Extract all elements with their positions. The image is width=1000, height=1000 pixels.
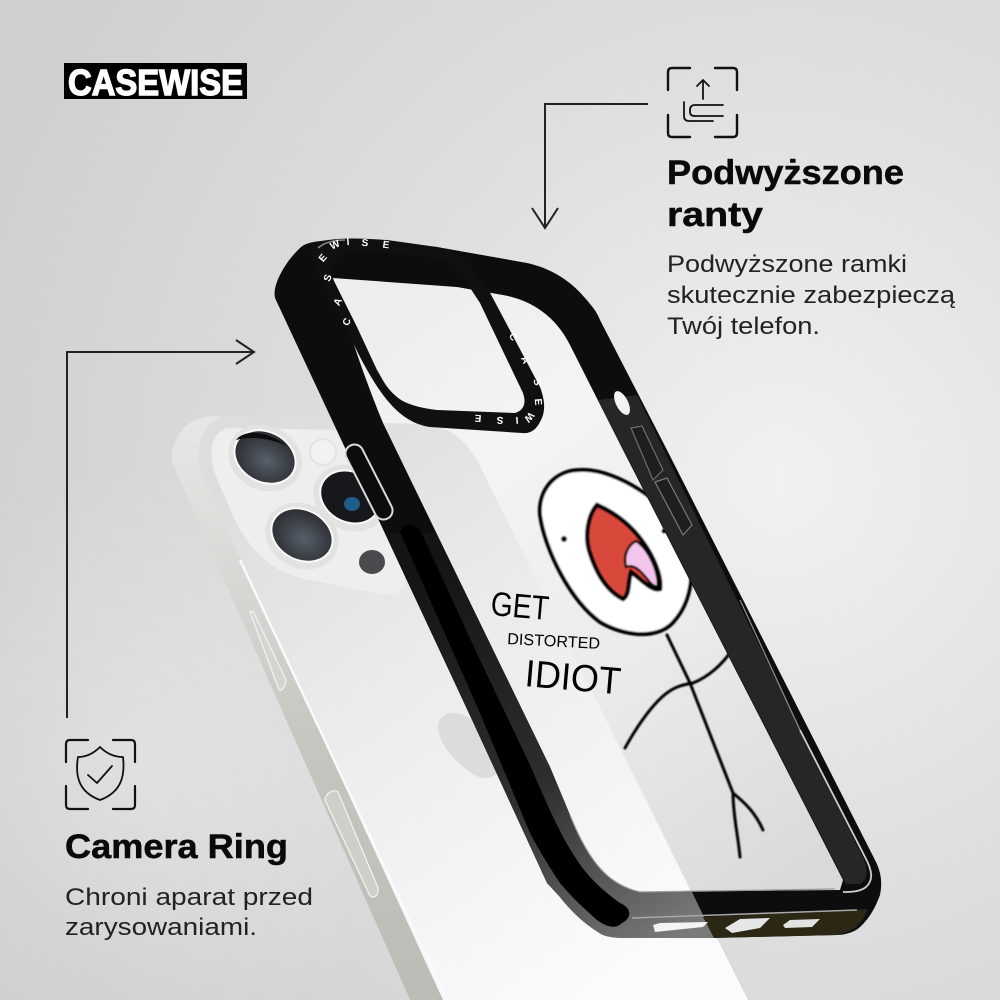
ring edge highlight	[318, 240, 345, 248]
camera bump	[211, 428, 405, 594]
GET: GET	[489, 585, 550, 628]
heading: raised edges: Podwyższone	[667, 154, 904, 192]
arrow: camera callout to ring	[67, 340, 254, 718]
usb cutout	[725, 918, 770, 933]
speaker cutout right	[783, 919, 820, 928]
body text: camera ring: zarysowaniami.	[65, 914, 257, 941]
sensor	[359, 550, 385, 574]
body and limbs	[625, 635, 763, 857]
ring lettering: E	[532, 398, 543, 406]
ring lettering: W	[329, 238, 342, 252]
lens three	[301, 452, 399, 544]
illustration: stick figure	[540, 470, 763, 857]
phone side button lower	[325, 791, 378, 897]
ring lettering: S	[530, 377, 543, 387]
ring lettering: A	[518, 355, 531, 366]
IDIOT: IDIOT	[523, 653, 623, 703]
mute cutout	[611, 389, 633, 417]
icon: raised edges	[668, 68, 737, 137]
bottom olive edge	[703, 909, 868, 938]
ring lettering: I	[346, 237, 350, 248]
heading: camera ring: Camera Ring	[65, 828, 288, 866]
head	[540, 470, 692, 634]
camera ring	[311, 237, 544, 433]
inner edge highlight	[570, 815, 835, 892]
arrow: top callout to case edge	[532, 104, 648, 228]
tongue	[625, 541, 658, 586]
DISTORTED: DISTORTED	[507, 631, 601, 653]
ring lettering: S	[322, 273, 335, 283]
right eye	[661, 528, 667, 534]
illustration text	[489, 585, 623, 703]
right band highlight	[740, 600, 800, 730]
clear case panel	[333, 278, 843, 892]
body text: camera ring: Chroni aparat przed	[65, 884, 313, 911]
phone frame highlight	[240, 560, 447, 1000]
mouth	[587, 505, 660, 599]
ring lettering: E	[474, 412, 482, 423]
lens two	[253, 490, 351, 582]
speaker cutout left	[653, 922, 708, 932]
phone back seen through the case	[383, 423, 692, 893]
body text: camera ring	[65, 884, 313, 941]
heading line two: ranty	[667, 196, 763, 234]
right band dark grey strip	[598, 395, 867, 884]
phone body	[172, 416, 748, 1000]
left volume button	[342, 441, 396, 523]
flash	[310, 439, 336, 465]
ring lettering: S	[496, 414, 504, 425]
bottom light line	[632, 910, 857, 918]
ring lettering: C	[341, 317, 354, 328]
icon: shield	[66, 740, 135, 809]
right side button lower	[655, 478, 692, 535]
body text: raised edges	[667, 251, 956, 340]
apple logo ghost	[438, 713, 500, 778]
ring lettering: S	[361, 238, 369, 249]
ring lettering: I	[515, 414, 519, 425]
body text: raised edges: Twój telefon.	[667, 313, 820, 340]
phone behind the case	[172, 412, 748, 1000]
ring lettering: C	[506, 332, 519, 343]
right side button upper	[631, 426, 663, 480]
ring lettering: E	[382, 240, 390, 251]
ring lettering: E	[317, 252, 330, 264]
ring lettering	[317, 237, 543, 425]
lower left band over phone	[386, 533, 714, 938]
logo: CASEWISE	[68, 62, 243, 103]
case silhouette	[275, 240, 881, 938]
phone side frame	[172, 416, 443, 1000]
right band corner highlight	[800, 730, 871, 892]
left eye	[561, 536, 567, 542]
ring lettering: W	[521, 410, 536, 424]
body text: raised edges: skutecznie zabezpieczą	[667, 282, 956, 309]
left inner black strip	[400, 525, 629, 927]
body text: raised edges: Podwyższone ramki	[667, 251, 907, 278]
lens one	[216, 412, 314, 504]
ring lettering: A	[332, 297, 345, 308]
phone side button upper	[250, 611, 286, 690]
ring frame	[311, 238, 544, 433]
case frame	[275, 240, 881, 938]
